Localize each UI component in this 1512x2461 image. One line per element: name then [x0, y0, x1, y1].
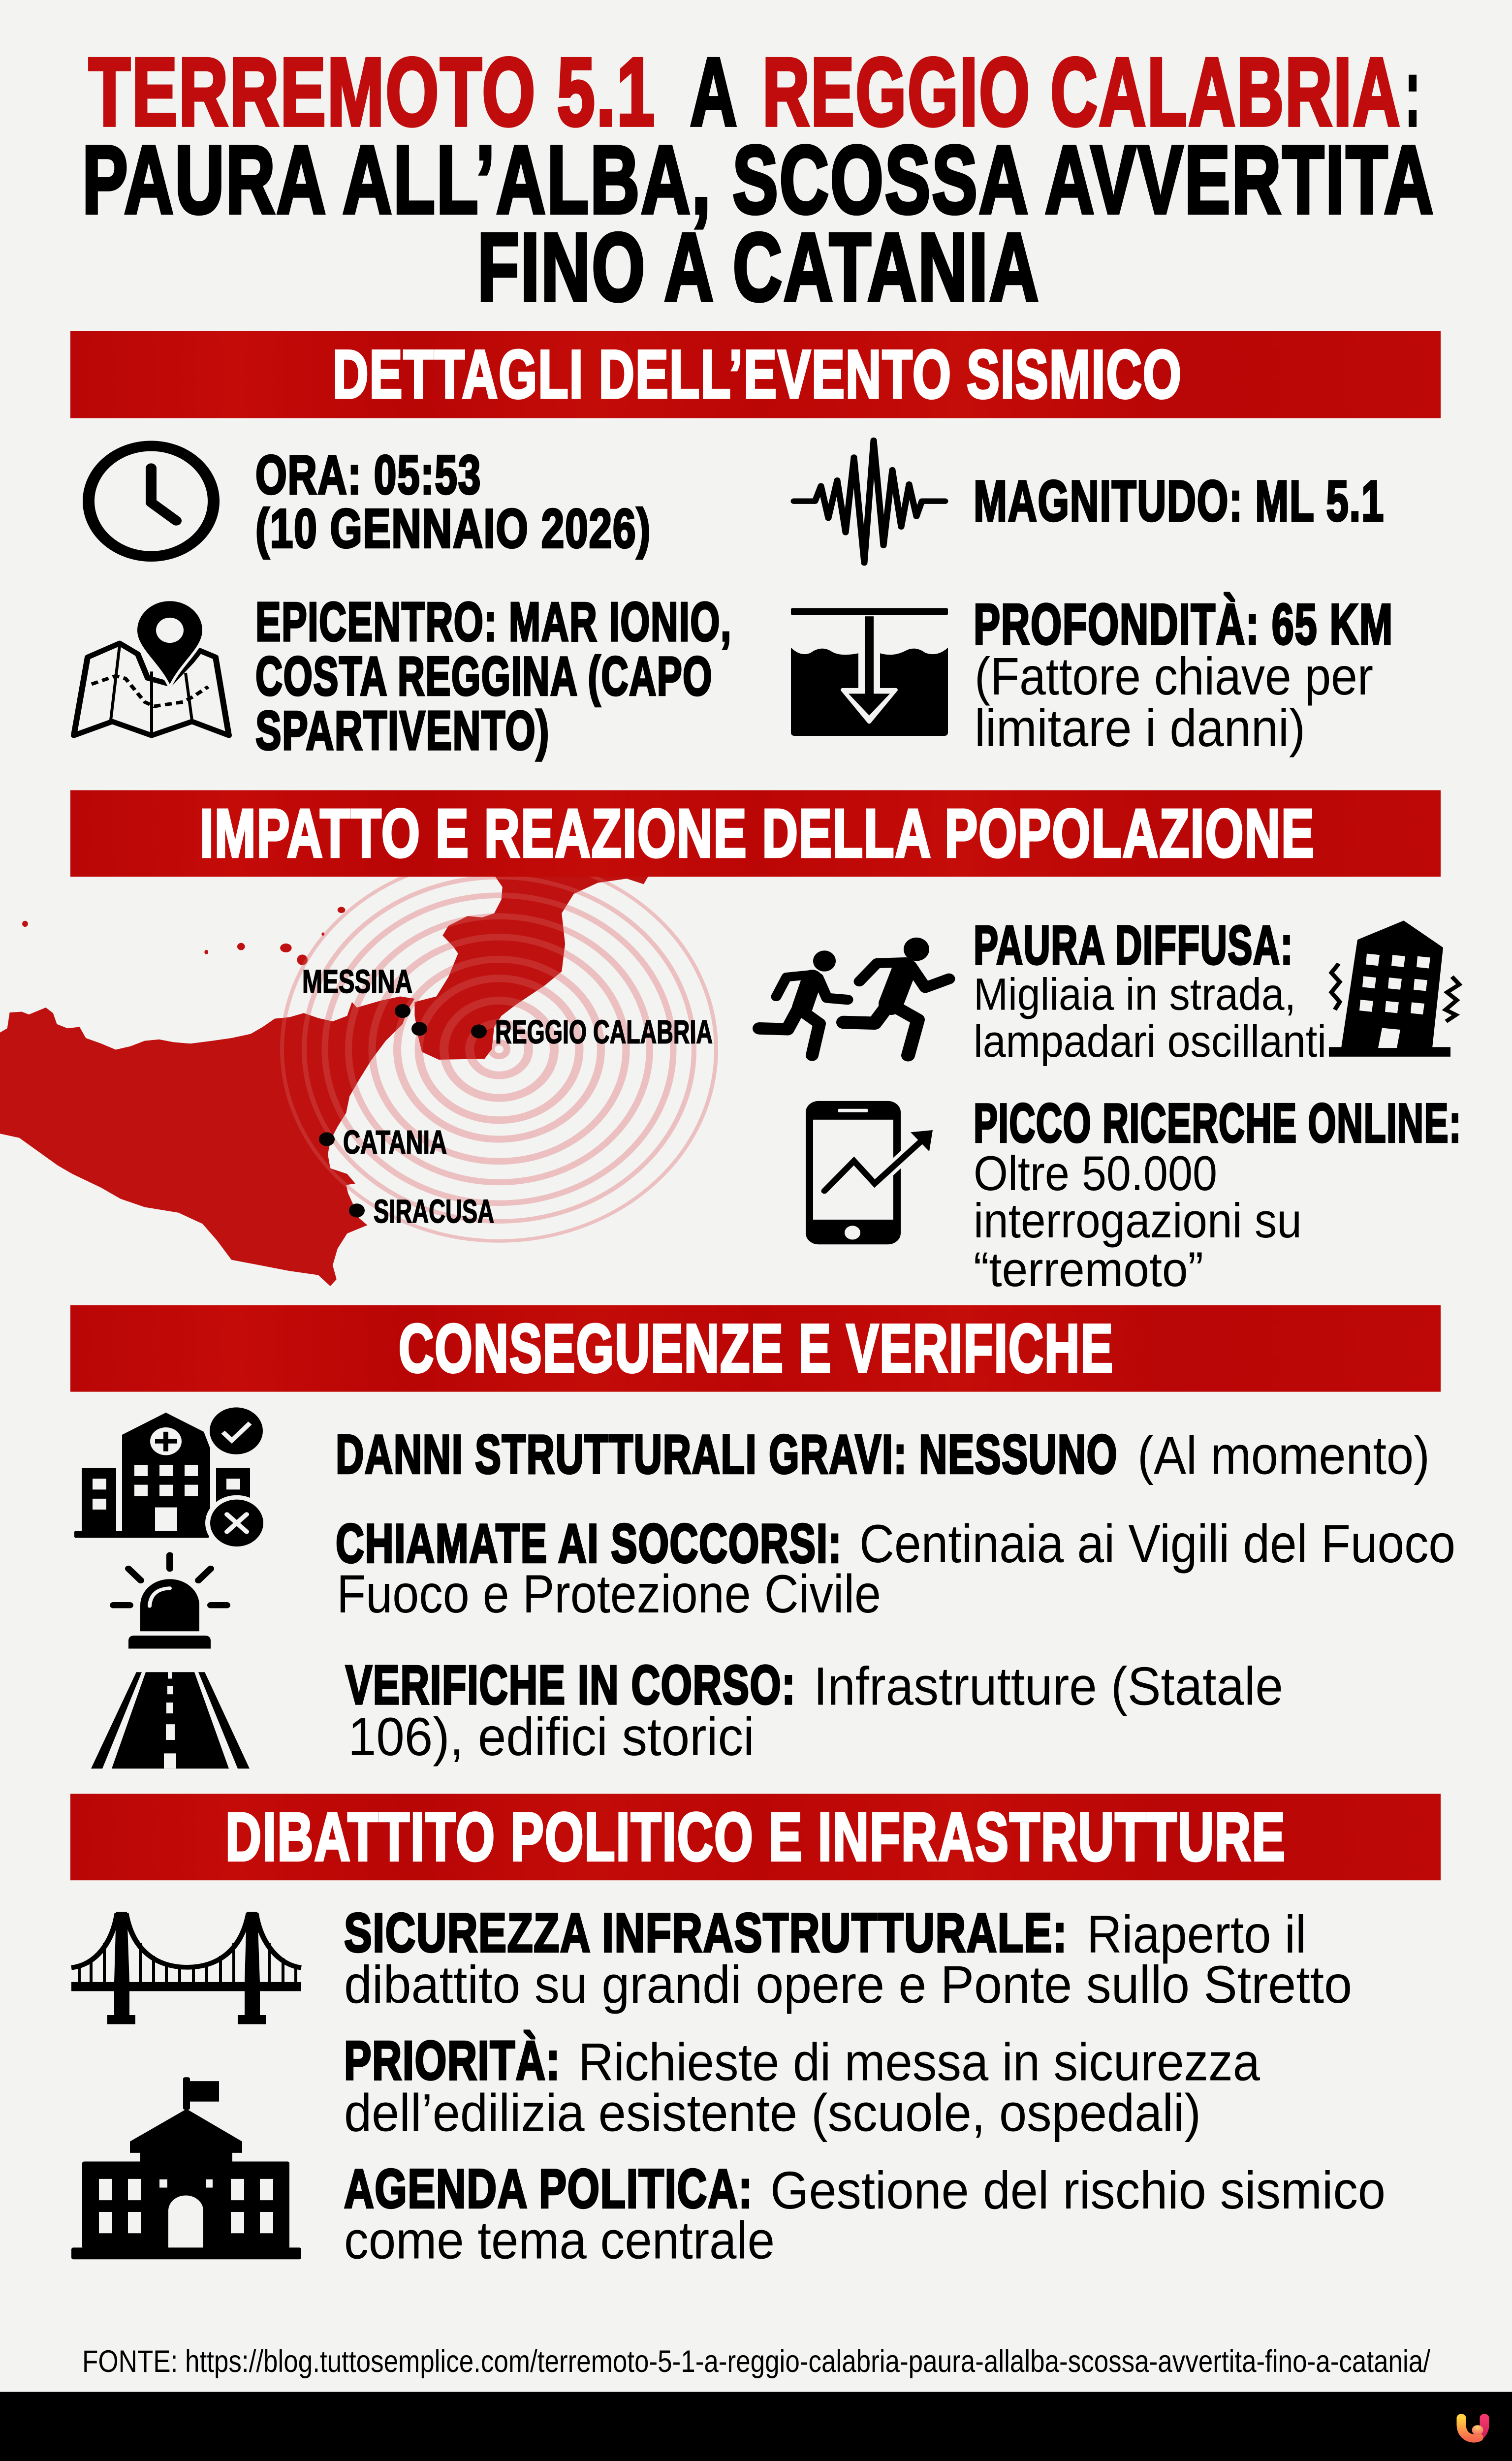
icon: emergency siren	[113, 1555, 227, 1649]
text: agenda politica: Gestione del rischio sismico	[770, 2161, 1386, 2220]
text: chiamate ai soccorsi: Fuoco e Protezione Civile	[337, 1564, 881, 1624]
text: picco ricerche online: interrogazioni su	[974, 1194, 1302, 1248]
text: ora	[255, 444, 651, 559]
title: A	[690, 38, 738, 146]
city labels: CATANIA	[343, 1124, 447, 1161]
icon: seismic wave	[794, 441, 945, 563]
text: paura diffusa: PAURA DIFFUSA:	[974, 915, 1293, 976]
text: chiamate ai soccorsi: CHIAMATE AI SOCCORSI:	[336, 1513, 842, 1574]
icon: road	[91, 1672, 250, 1768]
text: sicurezza infrastrutturale: SICUREZZA INFRASTRUTTURALE:	[344, 1902, 1068, 1963]
text: picco ricerche online: “terremoto”	[974, 1242, 1203, 1297]
banner: conseguenze e verifiche	[70, 1305, 1441, 1392]
icon: shaking building	[1329, 920, 1459, 1057]
text: epicentro: EPICENTRO: MAR IONIO,	[255, 591, 732, 653]
text: profondita: (Fattore chiave per	[975, 647, 1373, 706]
city dots	[319, 1004, 487, 1218]
seismic rings	[282, 857, 716, 1241]
logo	[1461, 2418, 1484, 2438]
text: verifiche in corso	[346, 1655, 1283, 1767]
text: epicentro	[255, 591, 732, 761]
rings over land	[282, 857, 716, 1241]
text: priorita: PRIORITÀ:	[344, 2030, 561, 2091]
text: agenda politica: AGENDA POLITICA:	[344, 2158, 753, 2220]
text: profondita: limitare i danni)	[975, 699, 1305, 758]
land shapes	[0, 872, 651, 1286]
text: sicurezza infrastrutturale: Riaperto il	[1087, 1905, 1306, 1964]
city labels	[302, 963, 713, 1230]
title: :	[1405, 38, 1421, 146]
text: verifiche in corso: Infrastrutture (Statale	[814, 1656, 1283, 1716]
title	[82, 38, 1435, 321]
banner: dettagli dell'evento sismico	[70, 331, 1441, 418]
icon: government building with flag	[71, 2077, 301, 2259]
title: FINO A CATANIA	[477, 213, 1040, 321]
icon: clock	[89, 446, 214, 556]
banner: conseguenze e verifiche: CONSEGUENZE E VERIFICHE	[399, 1310, 1114, 1387]
text: agenda politica: come tema centrale	[344, 2211, 775, 2270]
city labels: SIRACUSA	[374, 1193, 494, 1230]
text: paura diffusa: Migliaia in strada,	[974, 969, 1296, 1019]
icon: depth	[791, 608, 948, 736]
black footer bar	[0, 2392, 1512, 2461]
text: paura diffusa: lampadari oscillanti	[974, 1015, 1326, 1066]
text: profondita	[974, 593, 1393, 758]
text: paura diffusa	[974, 915, 1326, 1066]
icon: running people	[759, 938, 949, 1055]
text: priorita: dell’edilizia esistente (scuole, ospedali)	[344, 2083, 1201, 2143]
text: agenda politica	[344, 2158, 1386, 2270]
icon: phone with rising chart	[806, 1101, 933, 1244]
text: epicentro: SPARTIVENTO)	[255, 700, 550, 761]
text: picco ricerche online: Oltre 50.000	[974, 1146, 1217, 1200]
city labels: MESSINA	[302, 963, 412, 1000]
city labels: REGGIO CALABRIA	[495, 1013, 713, 1050]
text: verifiche in corso: VERIFICHE IN CORSO:	[346, 1655, 796, 1716]
icon: map with pin	[74, 601, 229, 737]
text: ora: ORA: 05:53	[255, 444, 481, 506]
text: sicurezza infrastrutturale: dibattito su grandi opere e Ponte sullo Stretto	[344, 1956, 1352, 2015]
map: sicilia e calabria con onde sismiche	[0, 857, 716, 1286]
text: verifiche in corso: 106), edifici storici	[348, 1706, 755, 1767]
text: priorita: Richieste di messa in sicurezza	[578, 2033, 1260, 2092]
icon: suspension bridge	[71, 1912, 301, 2024]
text: chiamate ai soccorsi	[336, 1513, 1455, 1624]
text: sicurezza infrastrutturale	[344, 1902, 1352, 2015]
text: picco ricerche online	[974, 1093, 1462, 1297]
text: danni strutturali: (Al momento)	[1137, 1425, 1430, 1485]
text: priorita	[344, 2030, 1260, 2143]
icon: hospital with check and cross	[74, 1407, 263, 1546]
text: epicentro: COSTA REGGINA (CAPO	[255, 646, 713, 707]
title: TERREMOTO 5.1	[89, 38, 656, 146]
text: ora: (10 GENNAIO 2026)	[255, 498, 651, 559]
